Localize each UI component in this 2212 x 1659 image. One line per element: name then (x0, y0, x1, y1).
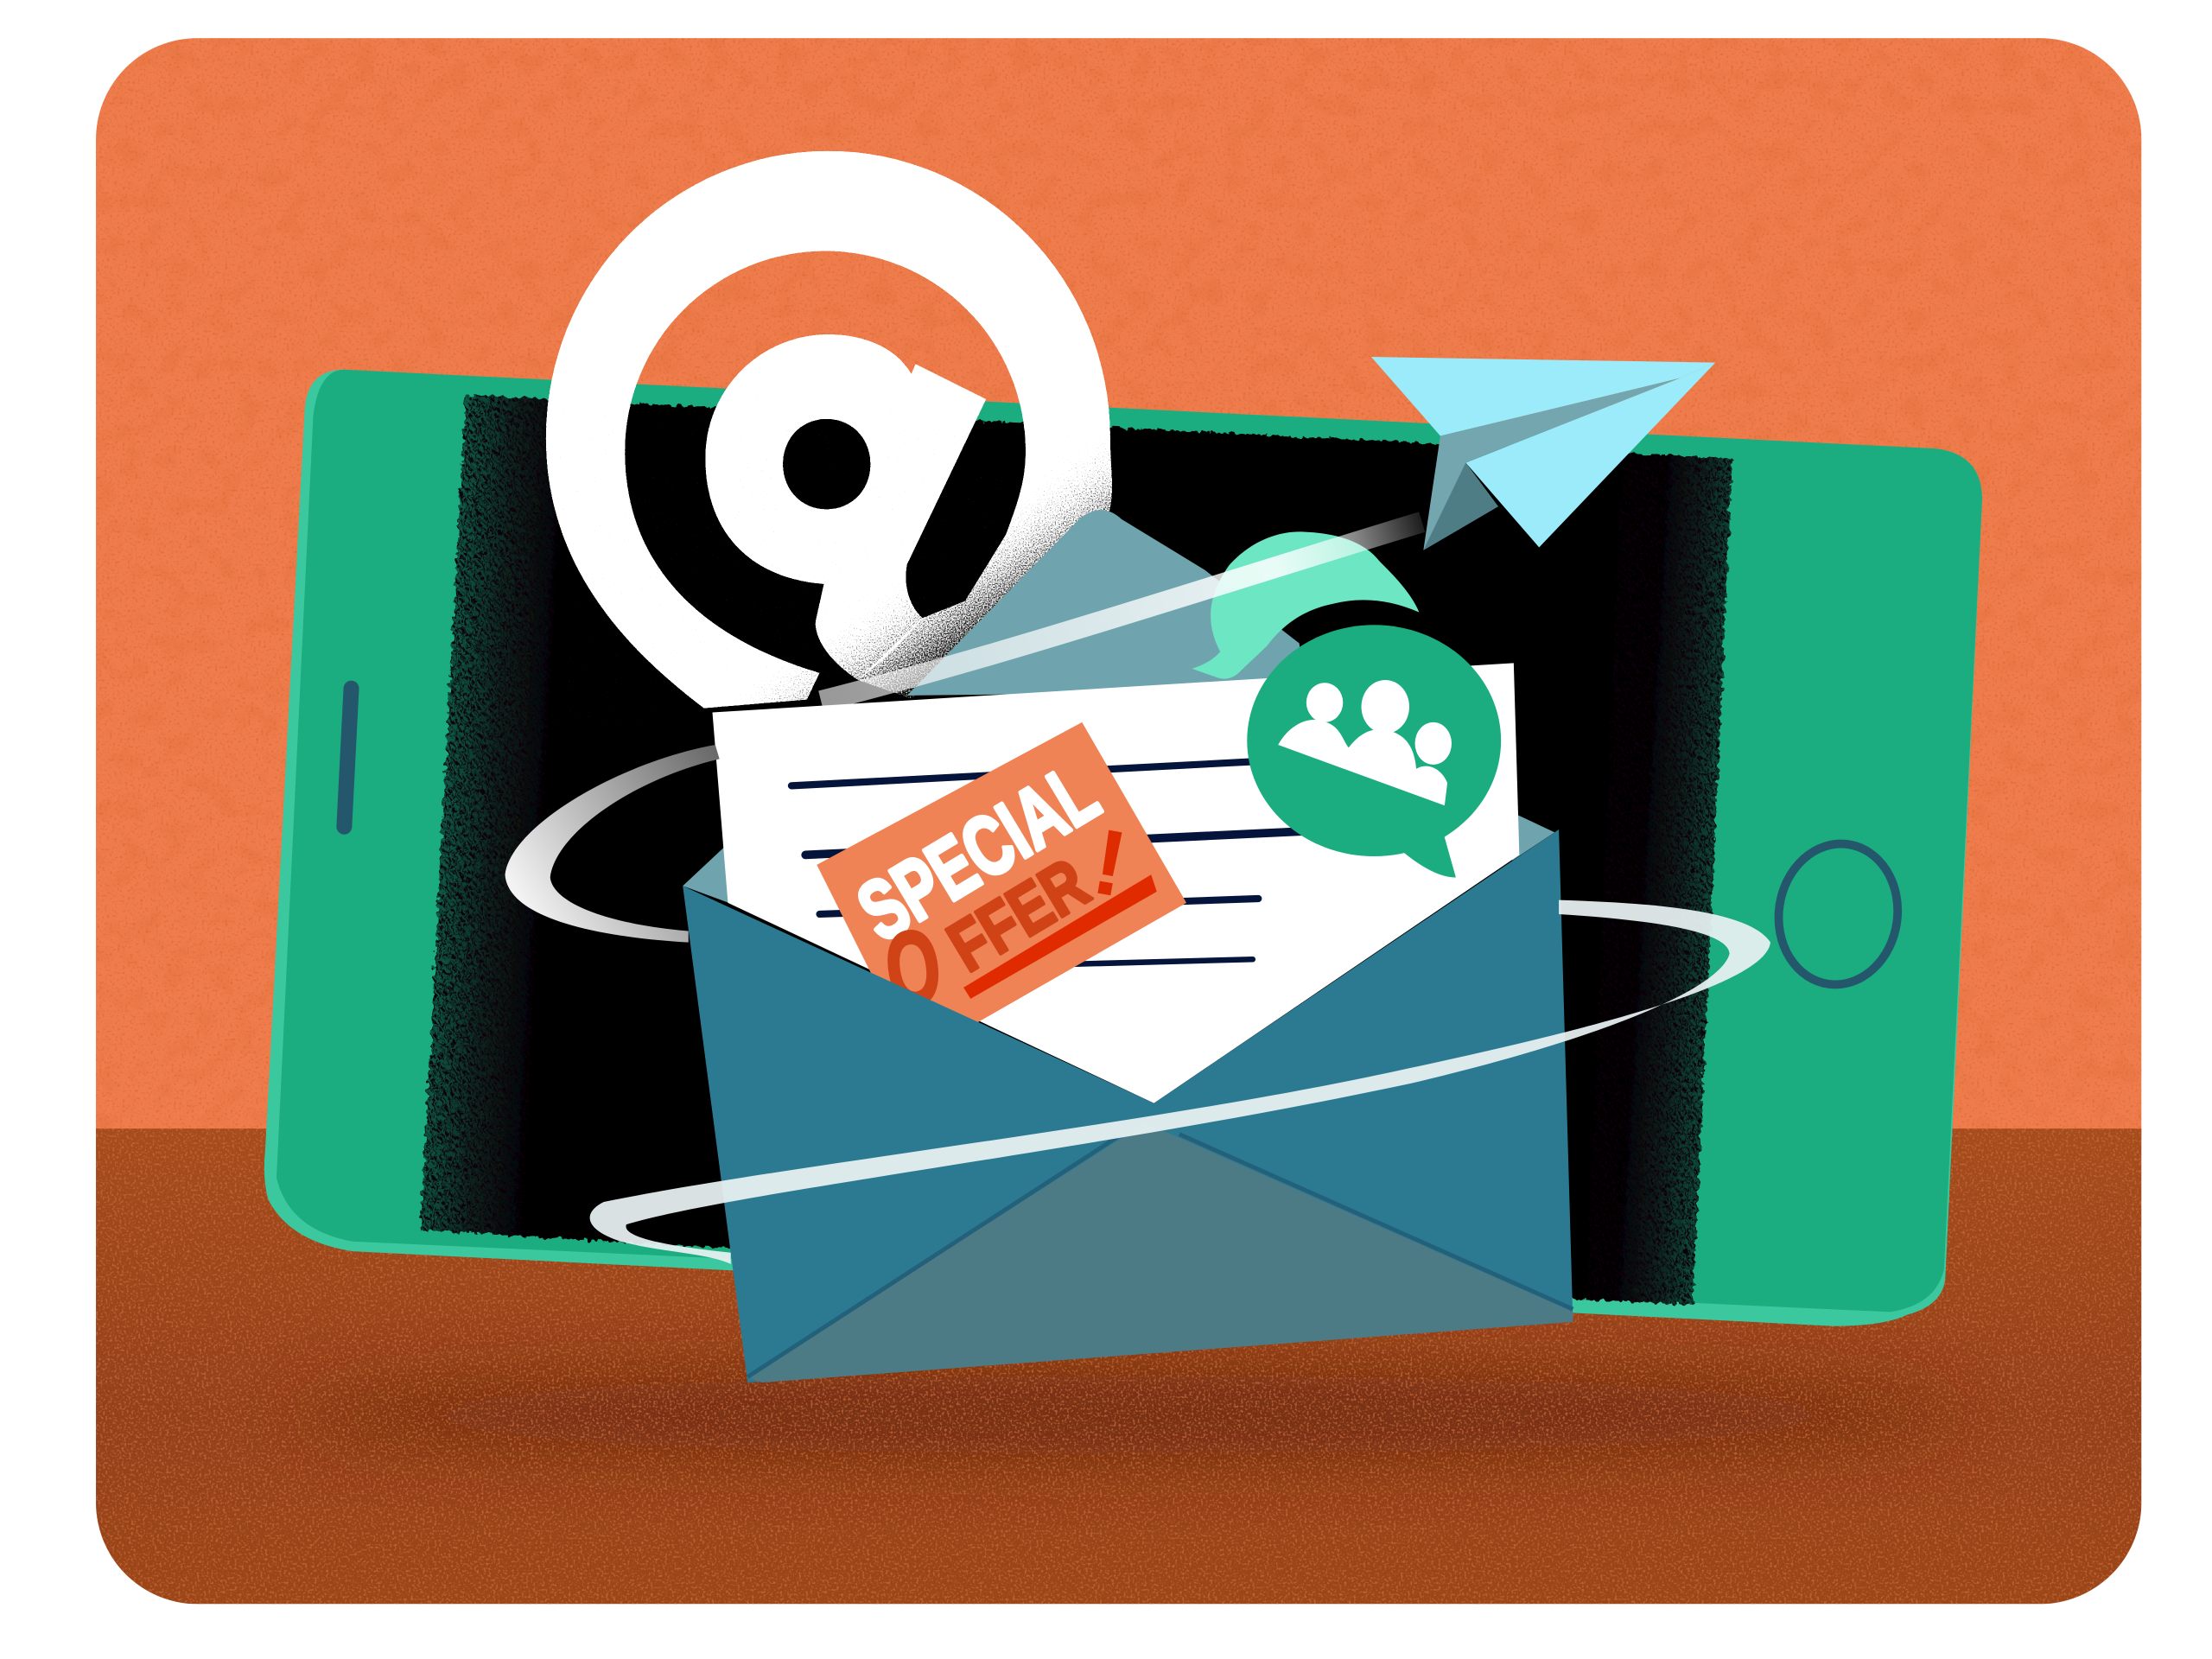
at sign (546, 151, 1112, 709)
orbit swoosh (505, 745, 1770, 1264)
phone speaker (344, 689, 352, 827)
group of people icon (1278, 680, 1452, 805)
special offer card (817, 722, 1186, 1037)
special label: SPECIAL (842, 744, 1114, 959)
light green chat bubble (1192, 531, 1419, 679)
at sign inner letter (705, 334, 986, 680)
green group chat bubble (1247, 625, 1501, 878)
offer O letter: O (879, 906, 948, 1029)
envelope front (683, 830, 1573, 1382)
phone body (264, 370, 1982, 1326)
offer underline (963, 874, 1157, 999)
phone home button (1770, 836, 1907, 992)
at sign outer ring (546, 151, 1112, 709)
phone screen (421, 395, 1732, 1305)
envelope bottom flap (747, 1123, 1573, 1382)
paper text lines (791, 762, 1312, 965)
paper trail line (821, 522, 1422, 701)
paper plane (1371, 357, 1715, 550)
exclamation mark: ! (1085, 808, 1135, 917)
letter paper (712, 663, 1519, 1103)
envelope back flap (683, 510, 1554, 906)
offer remaining letters: FFER (935, 844, 1102, 987)
